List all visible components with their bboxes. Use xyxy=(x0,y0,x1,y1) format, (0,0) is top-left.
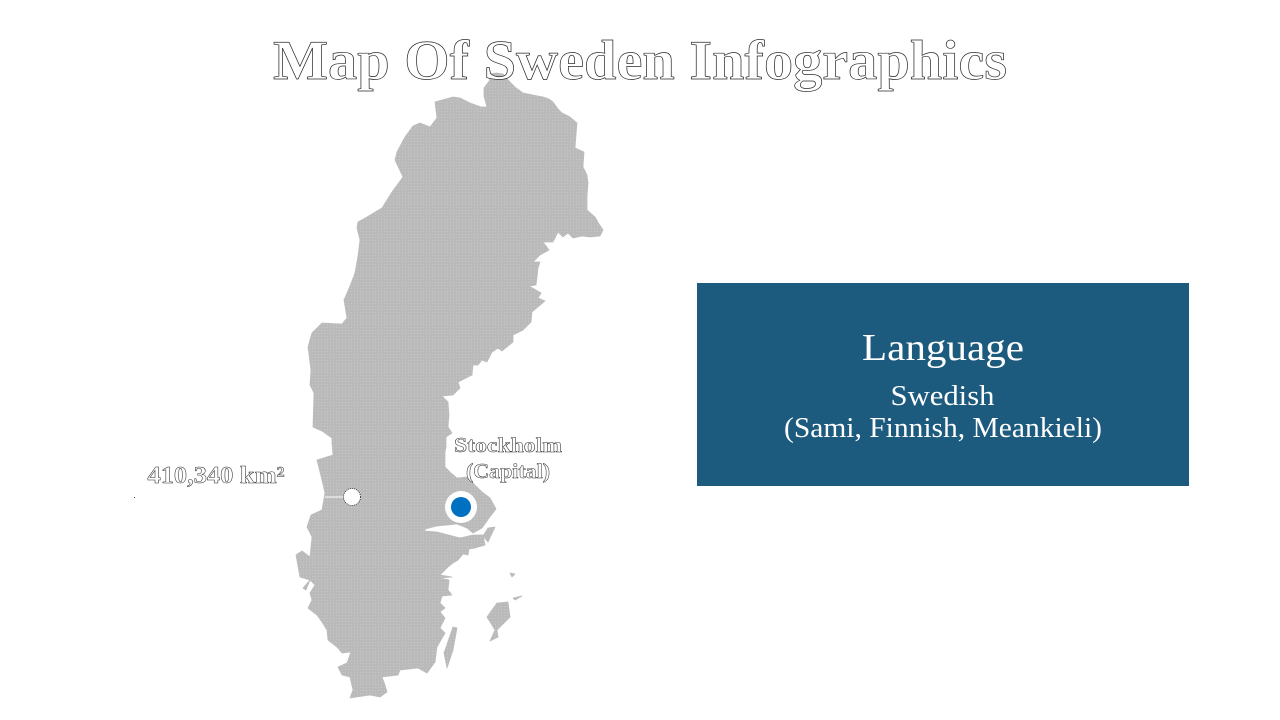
panel background xyxy=(697,283,1189,486)
island: archipelago xyxy=(483,527,495,542)
area callout xyxy=(134,463,360,506)
marker: area xyxy=(344,488,360,506)
leader line xyxy=(325,496,344,498)
language others: (Sami, Finnish, Meankieli) xyxy=(784,413,1102,444)
mainland xyxy=(296,73,603,698)
island: Faro xyxy=(513,596,522,600)
capital callout xyxy=(445,433,563,523)
language main: Swedish xyxy=(890,381,994,412)
map of Sweden xyxy=(296,73,603,698)
island: Gotska Sandon xyxy=(510,573,515,577)
marker: Stockholm xyxy=(445,491,477,523)
title: Map Of Sweden Infographics xyxy=(273,30,1007,92)
capital sublabel: (Capital) xyxy=(466,459,550,483)
panel: language xyxy=(697,283,1189,486)
island: Oland xyxy=(444,627,457,668)
area label: 410,340 km² xyxy=(148,463,284,489)
tiny dot xyxy=(134,497,135,498)
panel heading: Language xyxy=(862,327,1024,369)
capital label: Stockholm xyxy=(454,433,563,457)
island: Gotland xyxy=(487,602,510,641)
